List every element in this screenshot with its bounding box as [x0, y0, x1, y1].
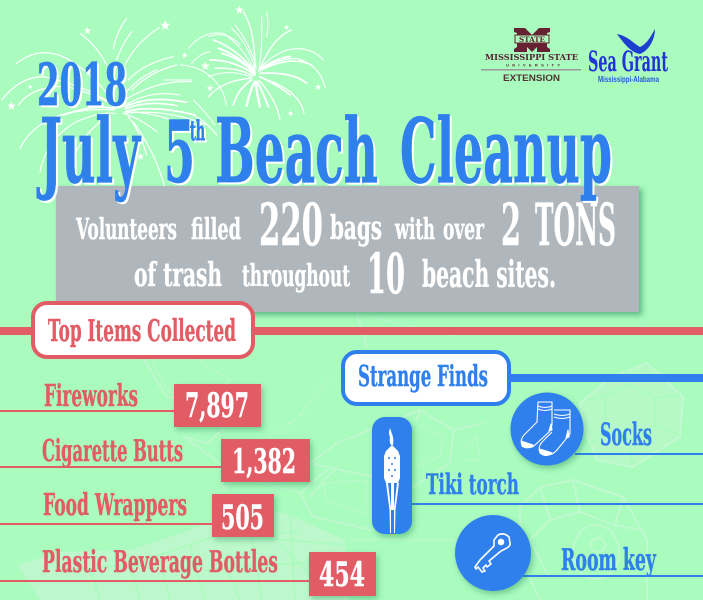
- item: food wrappers: Food Wrappers: [43, 488, 187, 523]
- item: fireworks: Fireworks: [44, 379, 138, 414]
- find: tiki torch: [372, 417, 703, 534]
- find: socks: Socks: [600, 417, 652, 453]
- summary text: 220: [259, 191, 323, 259]
- blue section bar: [510, 374, 703, 382]
- icon: socks: [521, 402, 570, 456]
- icon: room key: [475, 534, 510, 572]
- summary text: throughout: [242, 259, 350, 294]
- summary text: 10: [367, 241, 405, 306]
- item: fireworks: 7,897: [185, 386, 249, 426]
- title: July: [36, 98, 141, 203]
- fireworks: left burst: [2, 18, 217, 188]
- fireworks: stars: ★: [206, 84, 214, 94]
- item: plastic beverage bottles: 454: [319, 555, 365, 595]
- fireworks: stars: ★: [200, 59, 211, 73]
- summary text: 2: [501, 191, 521, 259]
- summary text: over: [443, 212, 484, 246]
- icon: tiki torch: [384, 428, 400, 533]
- item: cigarette butts: 1,382: [232, 442, 296, 482]
- find: socks: [510, 392, 703, 466]
- logo: Sea Grant Mississippi-Alabama: Mississippi-Alabama: [598, 75, 659, 84]
- item: cigarette butts: Cigarette Butts: [42, 434, 183, 469]
- summary text: [75, 191, 616, 306]
- fireworks: stars: ★: [159, 18, 172, 34]
- fireworks: right burst: [163, 12, 325, 125]
- fireworks: stars: ★: [83, 26, 92, 37]
- summary text: filled: [191, 212, 241, 246]
- summary text: beach sites.: [422, 254, 556, 296]
- item: plastic beverage bottles: [0, 545, 376, 596]
- summary text: Volunteers: [75, 212, 177, 246]
- title: 5: [164, 103, 195, 203]
- fireworks: stars: ★: [181, 51, 188, 60]
- fireworks: stars: ★: [283, 23, 290, 32]
- logo: Mississippi State University Extension: MISSISSIPPI STATE: [485, 53, 579, 63]
- logo: Sea Grant Mississippi-Alabama: [588, 29, 668, 84]
- title: th: [190, 116, 205, 147]
- summary text: with: [394, 212, 435, 246]
- title: 2018: [37, 51, 127, 119]
- logo: Mississippi State University Extension: STATE: [519, 35, 545, 44]
- background: upper-right turtle: [580, 363, 683, 467]
- red section bar: [0, 327, 703, 335]
- heading: strange finds: Strange Finds: [358, 359, 488, 393]
- heading: top items collected: [33, 303, 253, 357]
- item: food wrappers: 505: [221, 498, 264, 538]
- item: cigarette butts: [0, 434, 310, 482]
- item: fireworks: [0, 379, 261, 427]
- heading: top items collected: Top Items Collected: [48, 314, 236, 349]
- background: central sea turtle outline: [140, 313, 483, 540]
- summary text: bags: [330, 208, 382, 247]
- fireworks: stars: ★: [136, 152, 145, 163]
- fireworks: stars: ★: [287, 109, 294, 118]
- item: food wrappers: [0, 488, 274, 538]
- title: [36, 51, 612, 203]
- summary text: of trash: [134, 255, 222, 294]
- fireworks: stars: [6, 3, 322, 163]
- find: tiki torch: Tiki torch: [426, 468, 519, 501]
- title: Beach: [215, 98, 378, 203]
- background: lower-right turtle: [520, 480, 647, 600]
- logo: Mississippi State University Extension: UNIVERSITY: [506, 62, 560, 68]
- fireworks: stars: ★: [234, 3, 245, 17]
- find: room key: [455, 515, 703, 591]
- fireworks: stars: ★: [6, 99, 17, 113]
- heading: strange finds: [343, 352, 509, 404]
- fireworks: stars: ★: [314, 83, 322, 93]
- summary panel: [56, 186, 639, 312]
- item: plastic beverage bottles: Plastic Beverage Bottles: [42, 545, 278, 580]
- fireworks: stars: ★: [27, 83, 33, 91]
- logo: Mississippi State University Extension: [481, 28, 581, 83]
- background: lower-left turtle shell: [17, 505, 350, 600]
- logo: Mississippi State University Extension: EXTENSION: [503, 73, 560, 83]
